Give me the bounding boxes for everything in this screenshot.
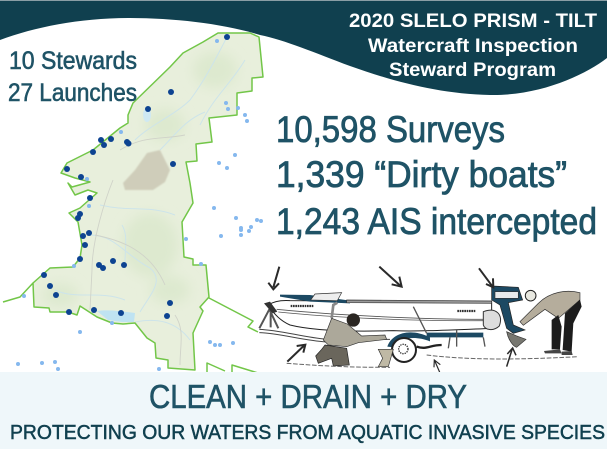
bending person (520, 290, 582, 355)
lake (97, 310, 135, 322)
slogan: CLEAN + DRAIN + DRY (149, 378, 467, 415)
propeller weeds (483, 310, 500, 330)
trailer frame (259, 309, 278, 328)
boat deck and stripes (280, 295, 350, 303)
light blue launch points (16, 39, 263, 371)
stewards and launches counts: 10 Stewards (9, 47, 137, 75)
stewards and launches counts (8, 47, 137, 107)
title text: 2020 SLELO PRISM - TILT (349, 11, 597, 32)
boat inspection illustration (259, 267, 582, 376)
key statistics: 10,598 Surveys (276, 109, 505, 150)
kneeling person (316, 303, 393, 367)
black arrows (268, 267, 516, 376)
outboard motor (492, 286, 525, 333)
bottom banner (0, 372, 607, 449)
banner background (0, 372, 607, 449)
hull lettering mark (291, 306, 476, 311)
key statistics (276, 109, 597, 242)
title text: Steward Program (389, 60, 556, 81)
trailer support bar (427, 333, 483, 337)
title text: Watercraft Inspection (368, 36, 578, 57)
top edge strip (0, 0, 607, 1)
ground scribble (287, 355, 578, 367)
title text (349, 11, 597, 81)
map boundary (3, 33, 263, 373)
key statistics: 1,339 “Dirty boats” (276, 154, 567, 195)
map of SLELO region (3, 33, 263, 373)
fender and wheel (387, 332, 430, 347)
bow post (264, 302, 277, 313)
header wave banner (0, 1, 607, 95)
forest preserve patch (123, 150, 170, 190)
stewards and launches counts: 27 Launches (8, 79, 137, 107)
tagline: PROTECTING OUR WATERS FROM AQUATIC INVASIVE SPECIES (10, 422, 605, 444)
small lake north (143, 108, 151, 122)
boat hull (268, 301, 492, 331)
map land fill (33, 33, 263, 370)
dark blue launch points (41, 34, 230, 319)
map terrain shading (42, 37, 245, 365)
